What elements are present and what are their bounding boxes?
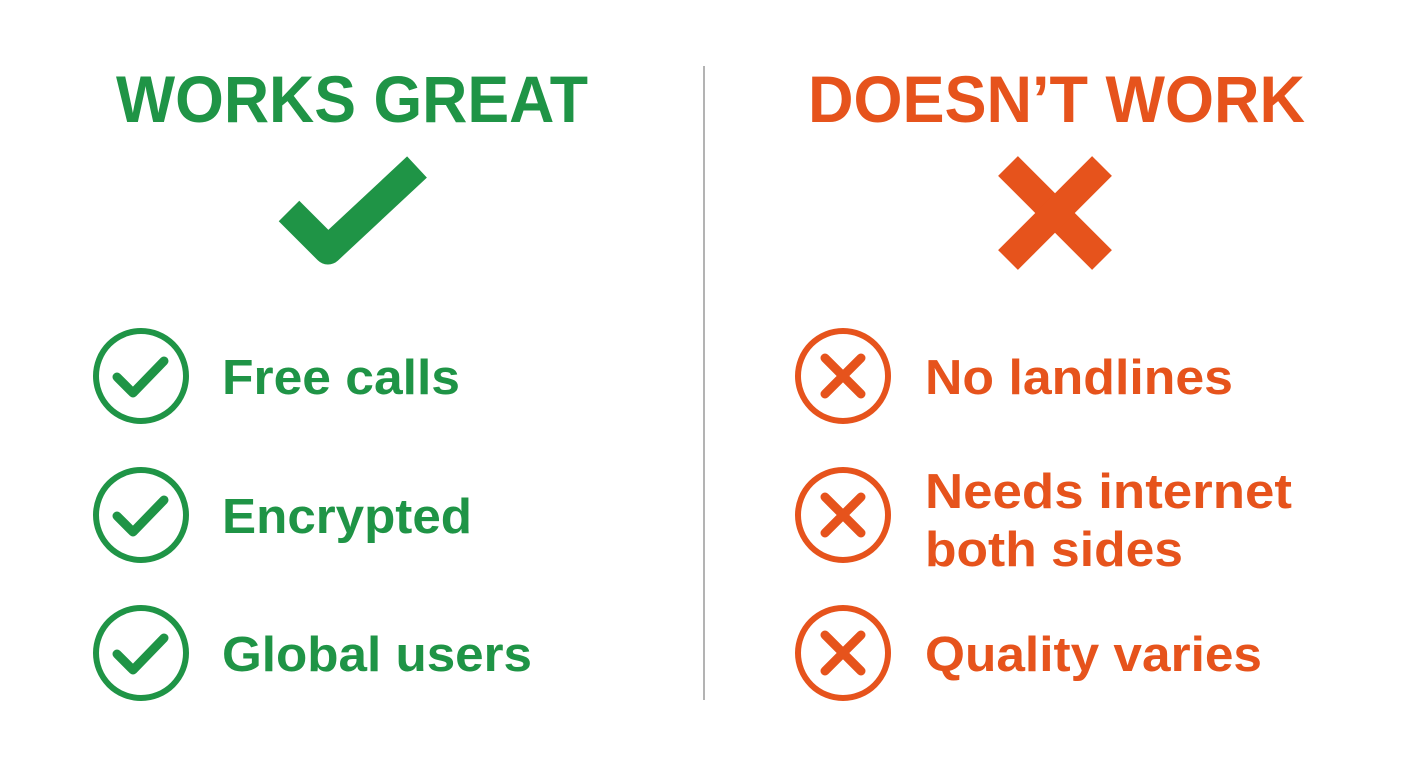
item: free calls: Free calls bbox=[222, 351, 460, 405]
item: no landlines: No landlines bbox=[925, 351, 1233, 405]
item: global users: Global users bbox=[222, 628, 532, 682]
icon: big check bbox=[289, 167, 417, 250]
icon: big x bbox=[1008, 166, 1102, 260]
panel: works great bbox=[96, 62, 588, 698]
title: doesn't work: DOESN’T WORK bbox=[808, 62, 1305, 136]
item: needs internet: Needs internet bbox=[925, 465, 1292, 519]
item: encrypted bbox=[96, 470, 472, 560]
item: needs internet: both sides bbox=[925, 523, 1183, 577]
panel: doesn't work bbox=[798, 62, 1305, 698]
title: works great: WORKS GREAT bbox=[116, 62, 588, 136]
item: global users bbox=[96, 608, 532, 698]
item: quality varies bbox=[798, 608, 1262, 698]
item: needs internet bbox=[798, 465, 1292, 577]
item: encrypted: Encrypted bbox=[222, 490, 472, 544]
item: free calls bbox=[96, 331, 460, 421]
item: quality varies: Quality varies bbox=[925, 628, 1262, 682]
item: no landlines bbox=[798, 331, 1233, 421]
